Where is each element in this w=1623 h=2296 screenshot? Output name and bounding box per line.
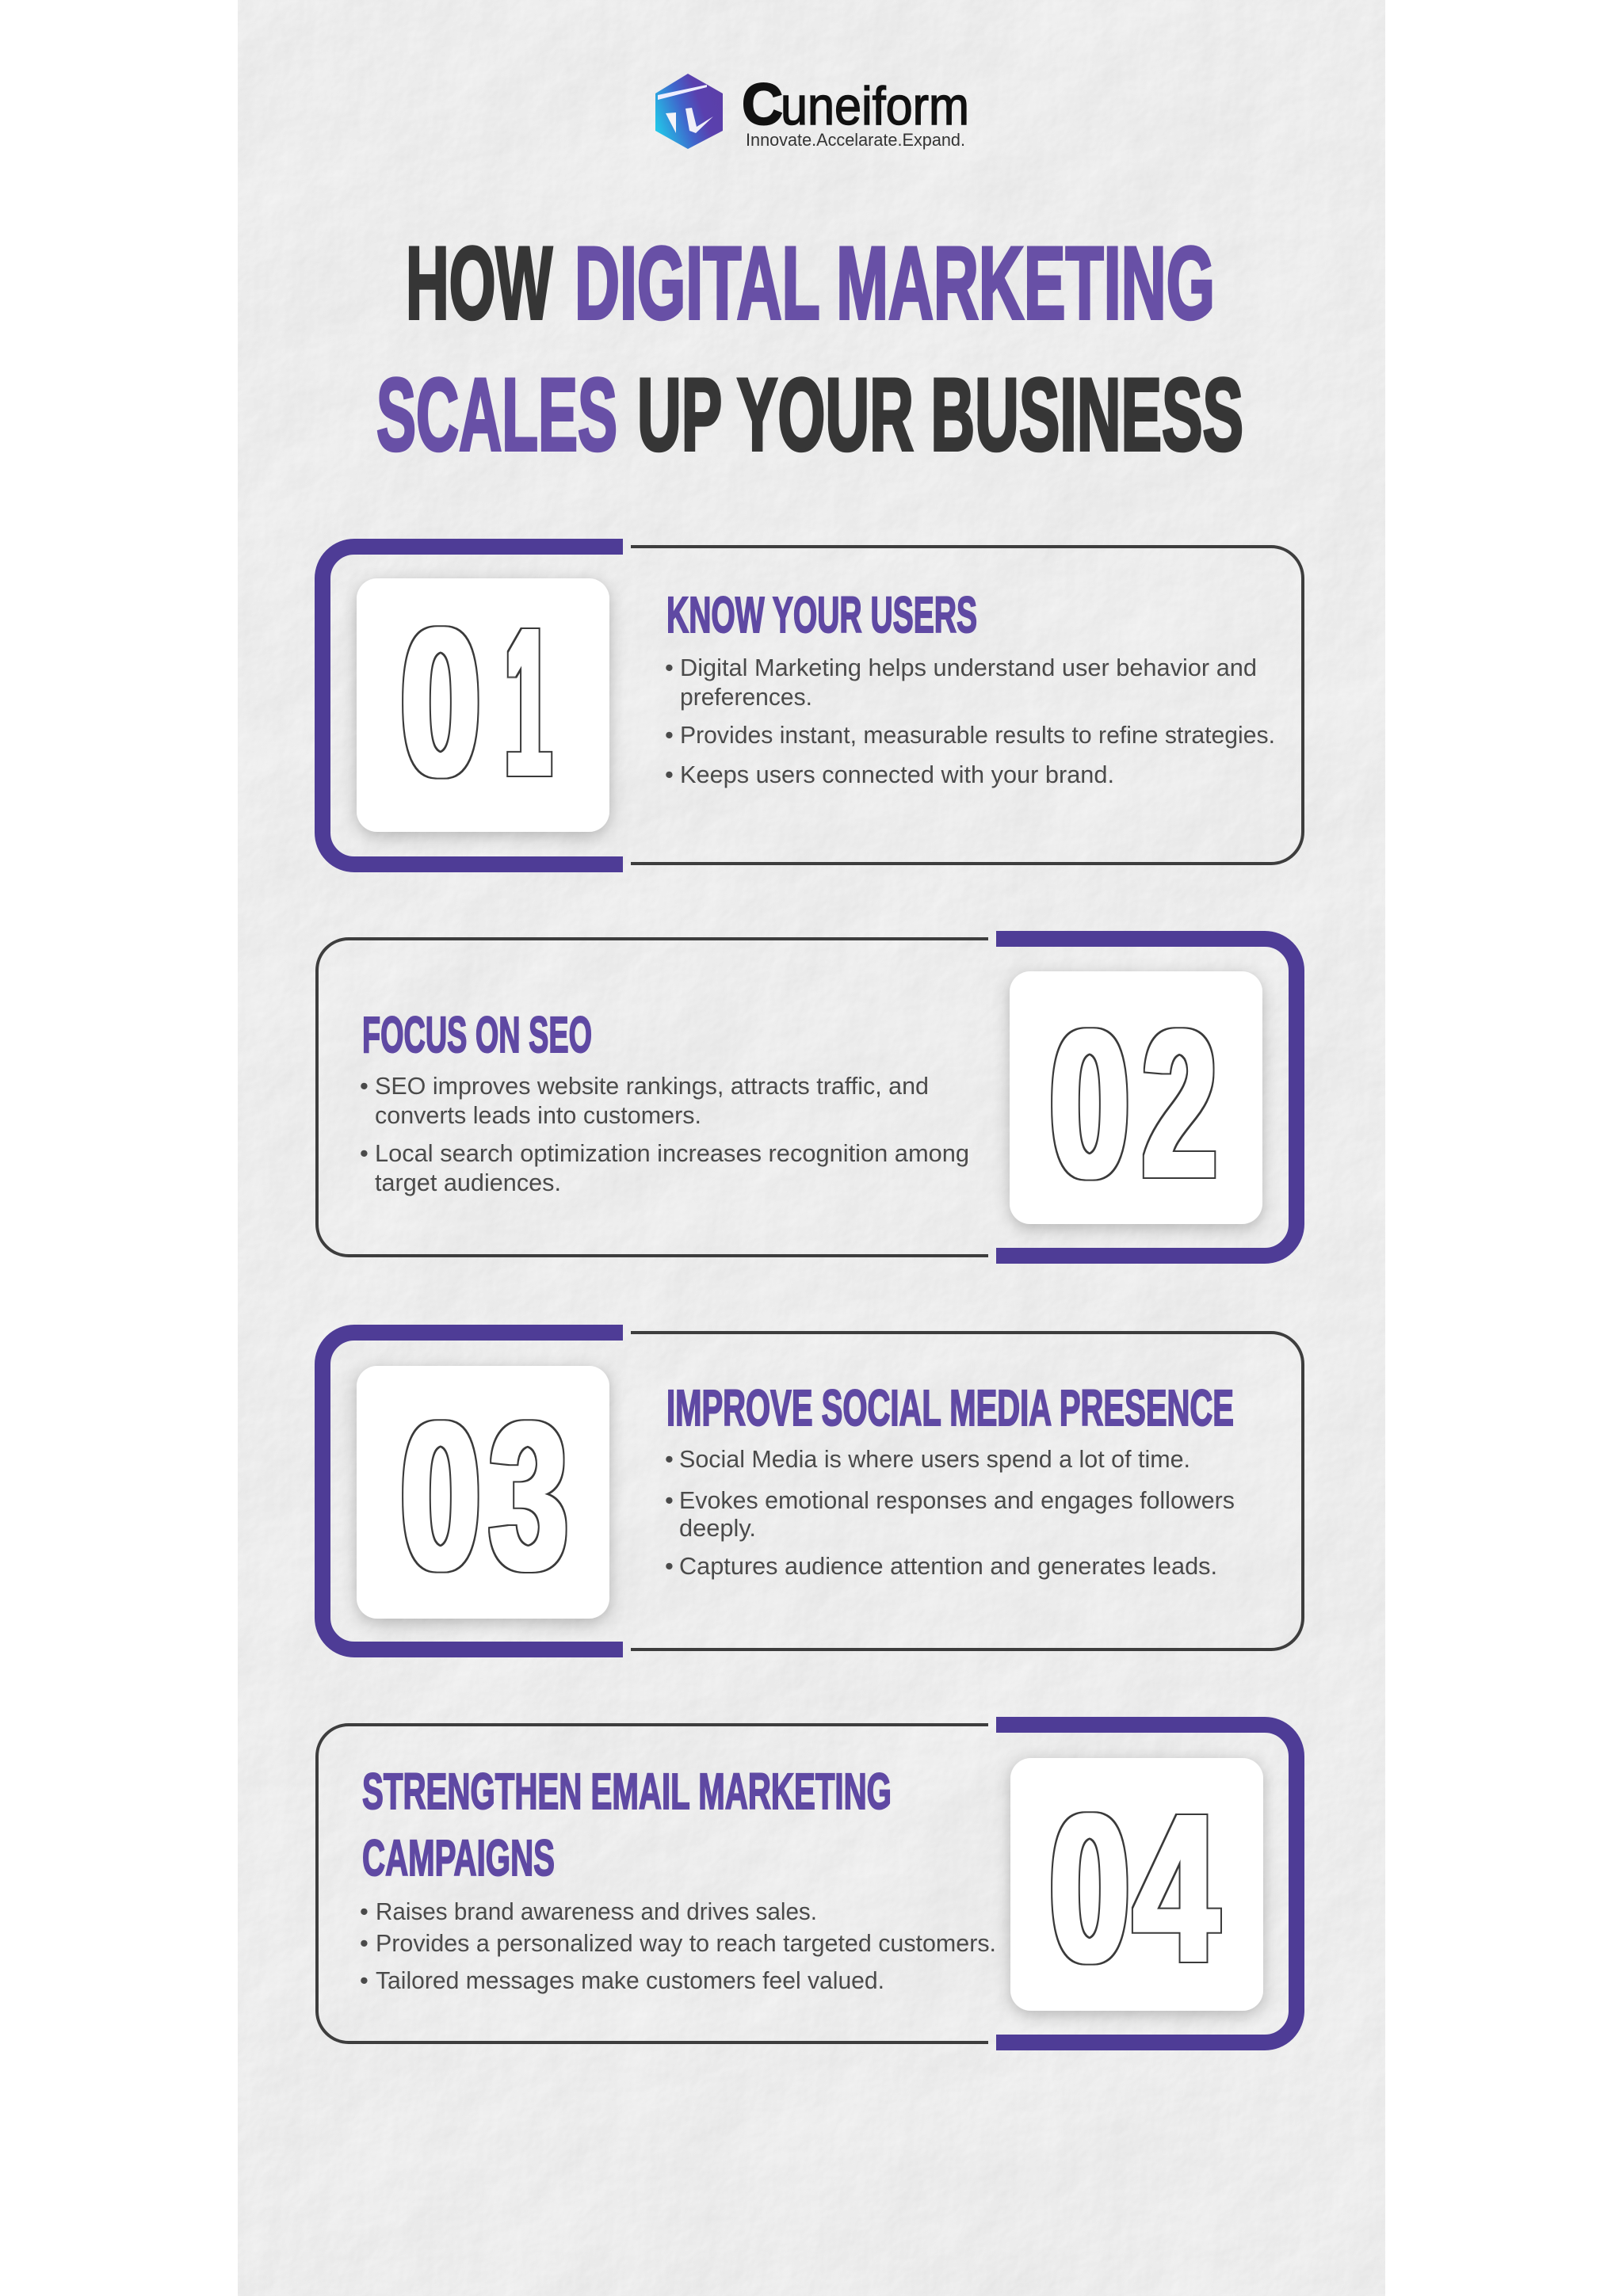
number 03: 3: [490, 1379, 567, 1614]
panel 4: strengthen email marketing campaigns: [317, 1725, 1296, 2042]
panel 1: know your users: [323, 547, 1303, 864]
panel 1: know your users: 1: [506, 585, 550, 820]
bullet list: •: [665, 721, 674, 749]
bullet list: Captures audience attention and generates leads.: [679, 1552, 1217, 1580]
number 04: 4: [1134, 1771, 1219, 2006]
number card: [1010, 1758, 1263, 2011]
panel 3: improve social media presence: [323, 1333, 1303, 1650]
bullet list: •: [360, 1966, 369, 1994]
bullet list: Local search optimization increases recognition among: [375, 1139, 969, 1167]
icon: cuneiform hexagon: [655, 74, 723, 149]
number card: [357, 1366, 609, 1619]
outline frame: [631, 1333, 1303, 1650]
bullet list: •: [665, 1486, 674, 1514]
bullet list: •: [360, 1072, 369, 1100]
bullet list: target audiences.: [375, 1169, 561, 1196]
purple frame: [323, 547, 623, 864]
logo: [655, 71, 969, 150]
bullet list: Keeps users connected with your brand.: [680, 761, 1114, 788]
tagline: Innovate.Accelarate.Expand.: [746, 130, 965, 150]
purple frame: [996, 939, 1296, 1256]
bullet list: converts leads into customers.: [375, 1101, 701, 1129]
purple frame: [323, 1333, 623, 1650]
bullet list: Evokes emotional responses and engages followers: [679, 1486, 1235, 1514]
paper background: [238, 0, 1385, 2296]
heading: CAMPAIGNS: [362, 1829, 555, 1886]
logo: uneiform: [781, 76, 969, 136]
panel 2: focus on seo: [317, 939, 1296, 1256]
bullet list: Social Media is where users spend a lot of time.: [679, 1445, 1190, 1473]
title: DIGITAL MARKETING: [575, 225, 1215, 341]
bullet list: •: [360, 1929, 369, 1957]
number 02: 2: [1143, 986, 1216, 1222]
bullet list: Digital Marketing helps understand user behavior and: [680, 654, 1257, 681]
heading: IMPROVE SOCIAL MEDIA PRESENCE: [666, 1379, 1234, 1436]
heading: KNOW YOUR USERS: [666, 586, 977, 643]
purple frame: [996, 1725, 1296, 2042]
bullet list: [360, 1897, 996, 1994]
bullet list: Raises brand awareness and drives sales.: [376, 1897, 817, 1925]
bullet list: preferences.: [680, 683, 812, 711]
bullet list: [360, 1072, 969, 1196]
bullet list: •: [360, 1897, 369, 1925]
bullet list: deeply.: [679, 1514, 756, 1542]
bullet list: [665, 654, 1275, 788]
bullet list: SEO improves website rankings, attracts traffic, and: [375, 1072, 929, 1100]
bullet list: [665, 1445, 1235, 1580]
bullet list: Provides instant, measurable results to refine strategies.: [680, 721, 1275, 749]
bullet list: •: [665, 761, 674, 788]
outline frame: [317, 1725, 988, 2042]
heading: [362, 1763, 892, 1886]
bullet list: •: [665, 654, 674, 681]
heading: FOCUS ON SEO: [362, 1006, 592, 1063]
number 04: 0: [1050, 1771, 1129, 2006]
number card: [1010, 971, 1262, 1224]
number 03: 0: [401, 1379, 480, 1614]
outline frame: [631, 547, 1303, 864]
number card: [357, 578, 609, 832]
title: HOW: [406, 225, 552, 341]
title: SCALES: [376, 357, 617, 472]
title: [376, 225, 1243, 472]
number 04: [1050, 1771, 1219, 2006]
bullet list: Provides a personalized way to reach targeted customers.: [376, 1929, 996, 1957]
number 01: 0: [401, 585, 480, 820]
heading: STRENGTHEN EMAIL MARKETING: [362, 1763, 892, 1820]
bullet list: •: [360, 1139, 369, 1167]
brand name: C: [742, 71, 783, 137]
outline frame: [317, 939, 988, 1256]
bullet list: Tailored messages make customers feel valued.: [376, 1966, 884, 1994]
bullet list: •: [665, 1552, 674, 1580]
number 02: 0: [1050, 986, 1129, 1222]
bullet list: •: [665, 1445, 674, 1473]
